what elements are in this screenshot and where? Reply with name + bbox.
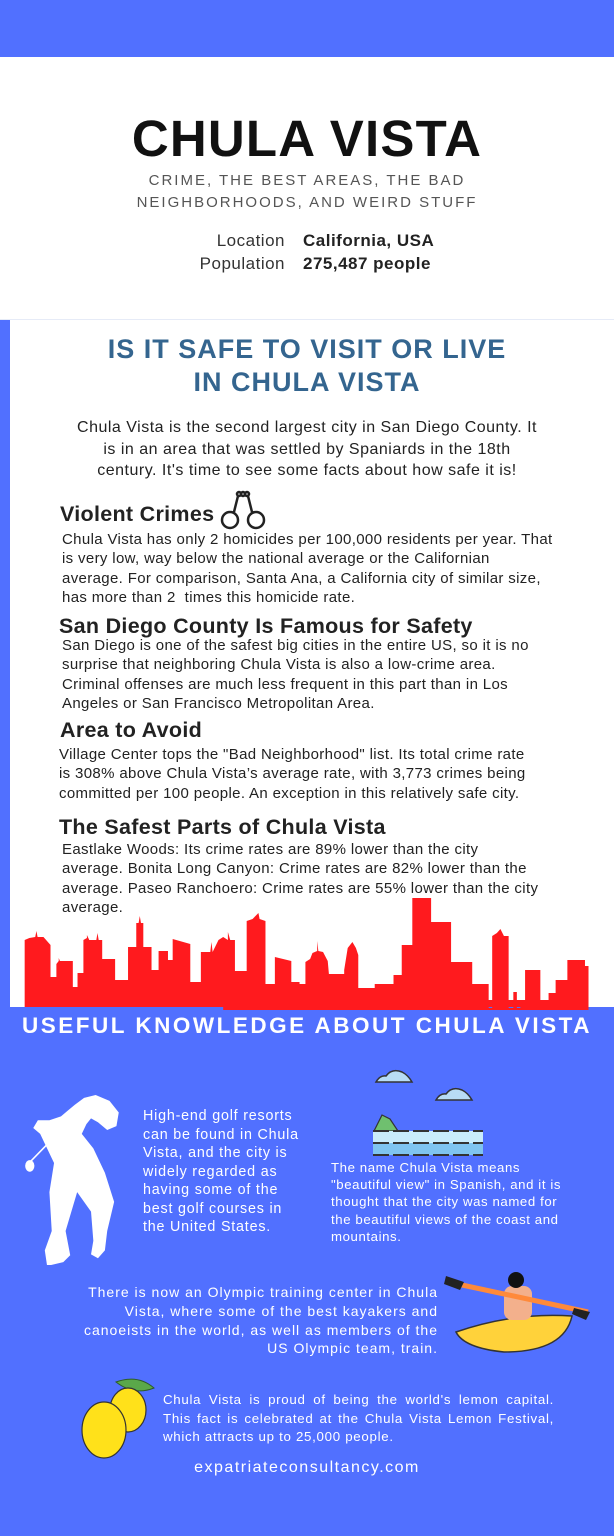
- heading: useful knowledge: USEFUL KNOWLEDGE ABOUT CHULA VISTA: [22, 1013, 592, 1038]
- footer url: expatriateconsultancy.com: [194, 1459, 420, 1476]
- icon: clouds: [374, 1070, 474, 1101]
- facts: California, USA: [303, 231, 434, 250]
- text: safest parts: average. Paseo Ranchoero: Crime rates are 55% lower than the city: [62, 880, 538, 897]
- heading: area to avoid: Area to Avoid: [60, 718, 202, 742]
- text: golf: Vista, and the city is: [143, 1145, 288, 1161]
- text: golf: widely regarded as: [143, 1164, 277, 1180]
- text: olympic: There is now an Olympic training center in Chula: [88, 1284, 438, 1300]
- header block: [0, 57, 614, 320]
- text: golf: the United States.: [143, 1219, 271, 1235]
- left blue strip: [0, 320, 10, 1010]
- text: safest parts: average. Bonita Long Canyon: Crime rates are 82% lower than the: [62, 860, 527, 877]
- text: golf: High-end golf resorts: [143, 1108, 293, 1124]
- text: golf: best golf courses in: [143, 1200, 282, 1216]
- text: name meaning: The name Chula Vista means: [331, 1160, 520, 1175]
- intro text: century. It's time to see some facts about how safe it is!: [97, 462, 517, 479]
- text: san diego: Angeles or San Francisco Metropolitan Area.: [62, 695, 375, 712]
- intro text: is in an area that was settled by Spaniards in the 18th: [103, 440, 511, 458]
- text: violent crimes: average. For comparison, Santa Ana, a California city of similar size,: [62, 570, 541, 587]
- safety heading: [108, 334, 506, 397]
- facts: [200, 231, 434, 273]
- facts: Location: [217, 231, 285, 250]
- text: area to avoid: committed per 100 people. An exception in this relatively safe city.: [59, 785, 519, 802]
- text: san diego: [62, 637, 529, 712]
- text: golf: having some of the: [143, 1182, 278, 1198]
- facts: 275,487 people: [303, 254, 431, 273]
- intro text: Chula Vista is the second largest city in San Diego County. It: [77, 419, 537, 436]
- text: name meaning: [331, 1160, 561, 1244]
- text: safest parts: average.: [62, 899, 123, 916]
- safety heading: IS IT SAFE TO VISIT OR LIVE: [108, 334, 506, 364]
- heading: san diego: San Diego County Is Famous for Safety: [59, 614, 473, 638]
- safety heading: IN CHULA VISTA: [194, 367, 420, 397]
- facts: Population: [200, 254, 285, 273]
- icon: kayaker: [444, 1272, 590, 1353]
- title: CHULA VISTA: [132, 110, 482, 167]
- text: san diego: Criminal offenses are much less frequent in this part than in Los: [62, 676, 508, 693]
- icon: golfer: [25, 1095, 119, 1265]
- skyline: [24, 898, 588, 1010]
- subtitle: CRIME, THE BEST AREAS, THE BAD: [149, 172, 465, 189]
- text: area to avoid: is 308% above Chula Vista’s average rate, with 3,773 crimes being: [59, 765, 526, 782]
- intro text: [77, 419, 537, 479]
- text: area to avoid: [59, 746, 526, 802]
- blue knowledge section: [0, 1007, 614, 1536]
- text: violent crimes: [62, 531, 553, 606]
- text: name meaning: thought that the city was named for: [331, 1194, 557, 1209]
- text: olympic: US Olympic team, train.: [267, 1340, 438, 1356]
- text: safest parts: Eastlake Woods: Its crime rates are 89% lower than the city: [62, 841, 478, 858]
- text: san diego: surprise that neighboring Chula Vista is also a low-crime area.: [62, 656, 496, 673]
- heading: safest parts: The Safest Parts of Chula Vista: [59, 815, 386, 839]
- top blue band: [0, 0, 614, 57]
- text: name meaning: mountains.: [331, 1229, 402, 1244]
- text: name meaning: "beautiful view" in Spanish, and it is: [331, 1177, 561, 1192]
- text: lemon: Chula Vista is proud of being the world's lemon capital. This fact is celebrated at the Chula Vista Lemon Festival, which attracts up to 25,000 people.: [163, 1392, 554, 1444]
- text: name meaning: the beautiful views of the coast and: [331, 1212, 559, 1227]
- icon: island coast: [373, 1114, 483, 1156]
- text: violent crimes: has more than 2 times this homicide rate.: [62, 589, 355, 606]
- text: golf: [143, 1108, 299, 1235]
- icon: handcuffs: [220, 490, 266, 530]
- text: san diego: San Diego is one of the safest big cities in the entire US, so it is no: [62, 637, 529, 654]
- text: olympic: Vista, where some of the best kayakers and: [125, 1303, 438, 1319]
- text: olympic: [84, 1284, 438, 1356]
- text: golf: can be found in Chula: [143, 1126, 299, 1142]
- heading: violent crimes: Violent Crimes: [60, 502, 214, 526]
- subtitle: [137, 172, 477, 211]
- subtitle: NEIGHBORHOODS, AND WEIRD STUFF: [137, 194, 477, 211]
- text: area to avoid: Village Center tops the "Bad Neighborhood" list. Its total crime rate: [59, 746, 525, 763]
- icon: lemons: [81, 1378, 155, 1459]
- text: violent crimes: is very low, way below the national average or the Californian: [62, 550, 490, 567]
- text: safest parts: [62, 841, 538, 916]
- text: olympic: canoeists in the world, as well as members of the: [84, 1322, 438, 1338]
- text: violent crimes: Chula Vista has only 2 homicides per 100,000 residents per year. That: [62, 531, 553, 548]
